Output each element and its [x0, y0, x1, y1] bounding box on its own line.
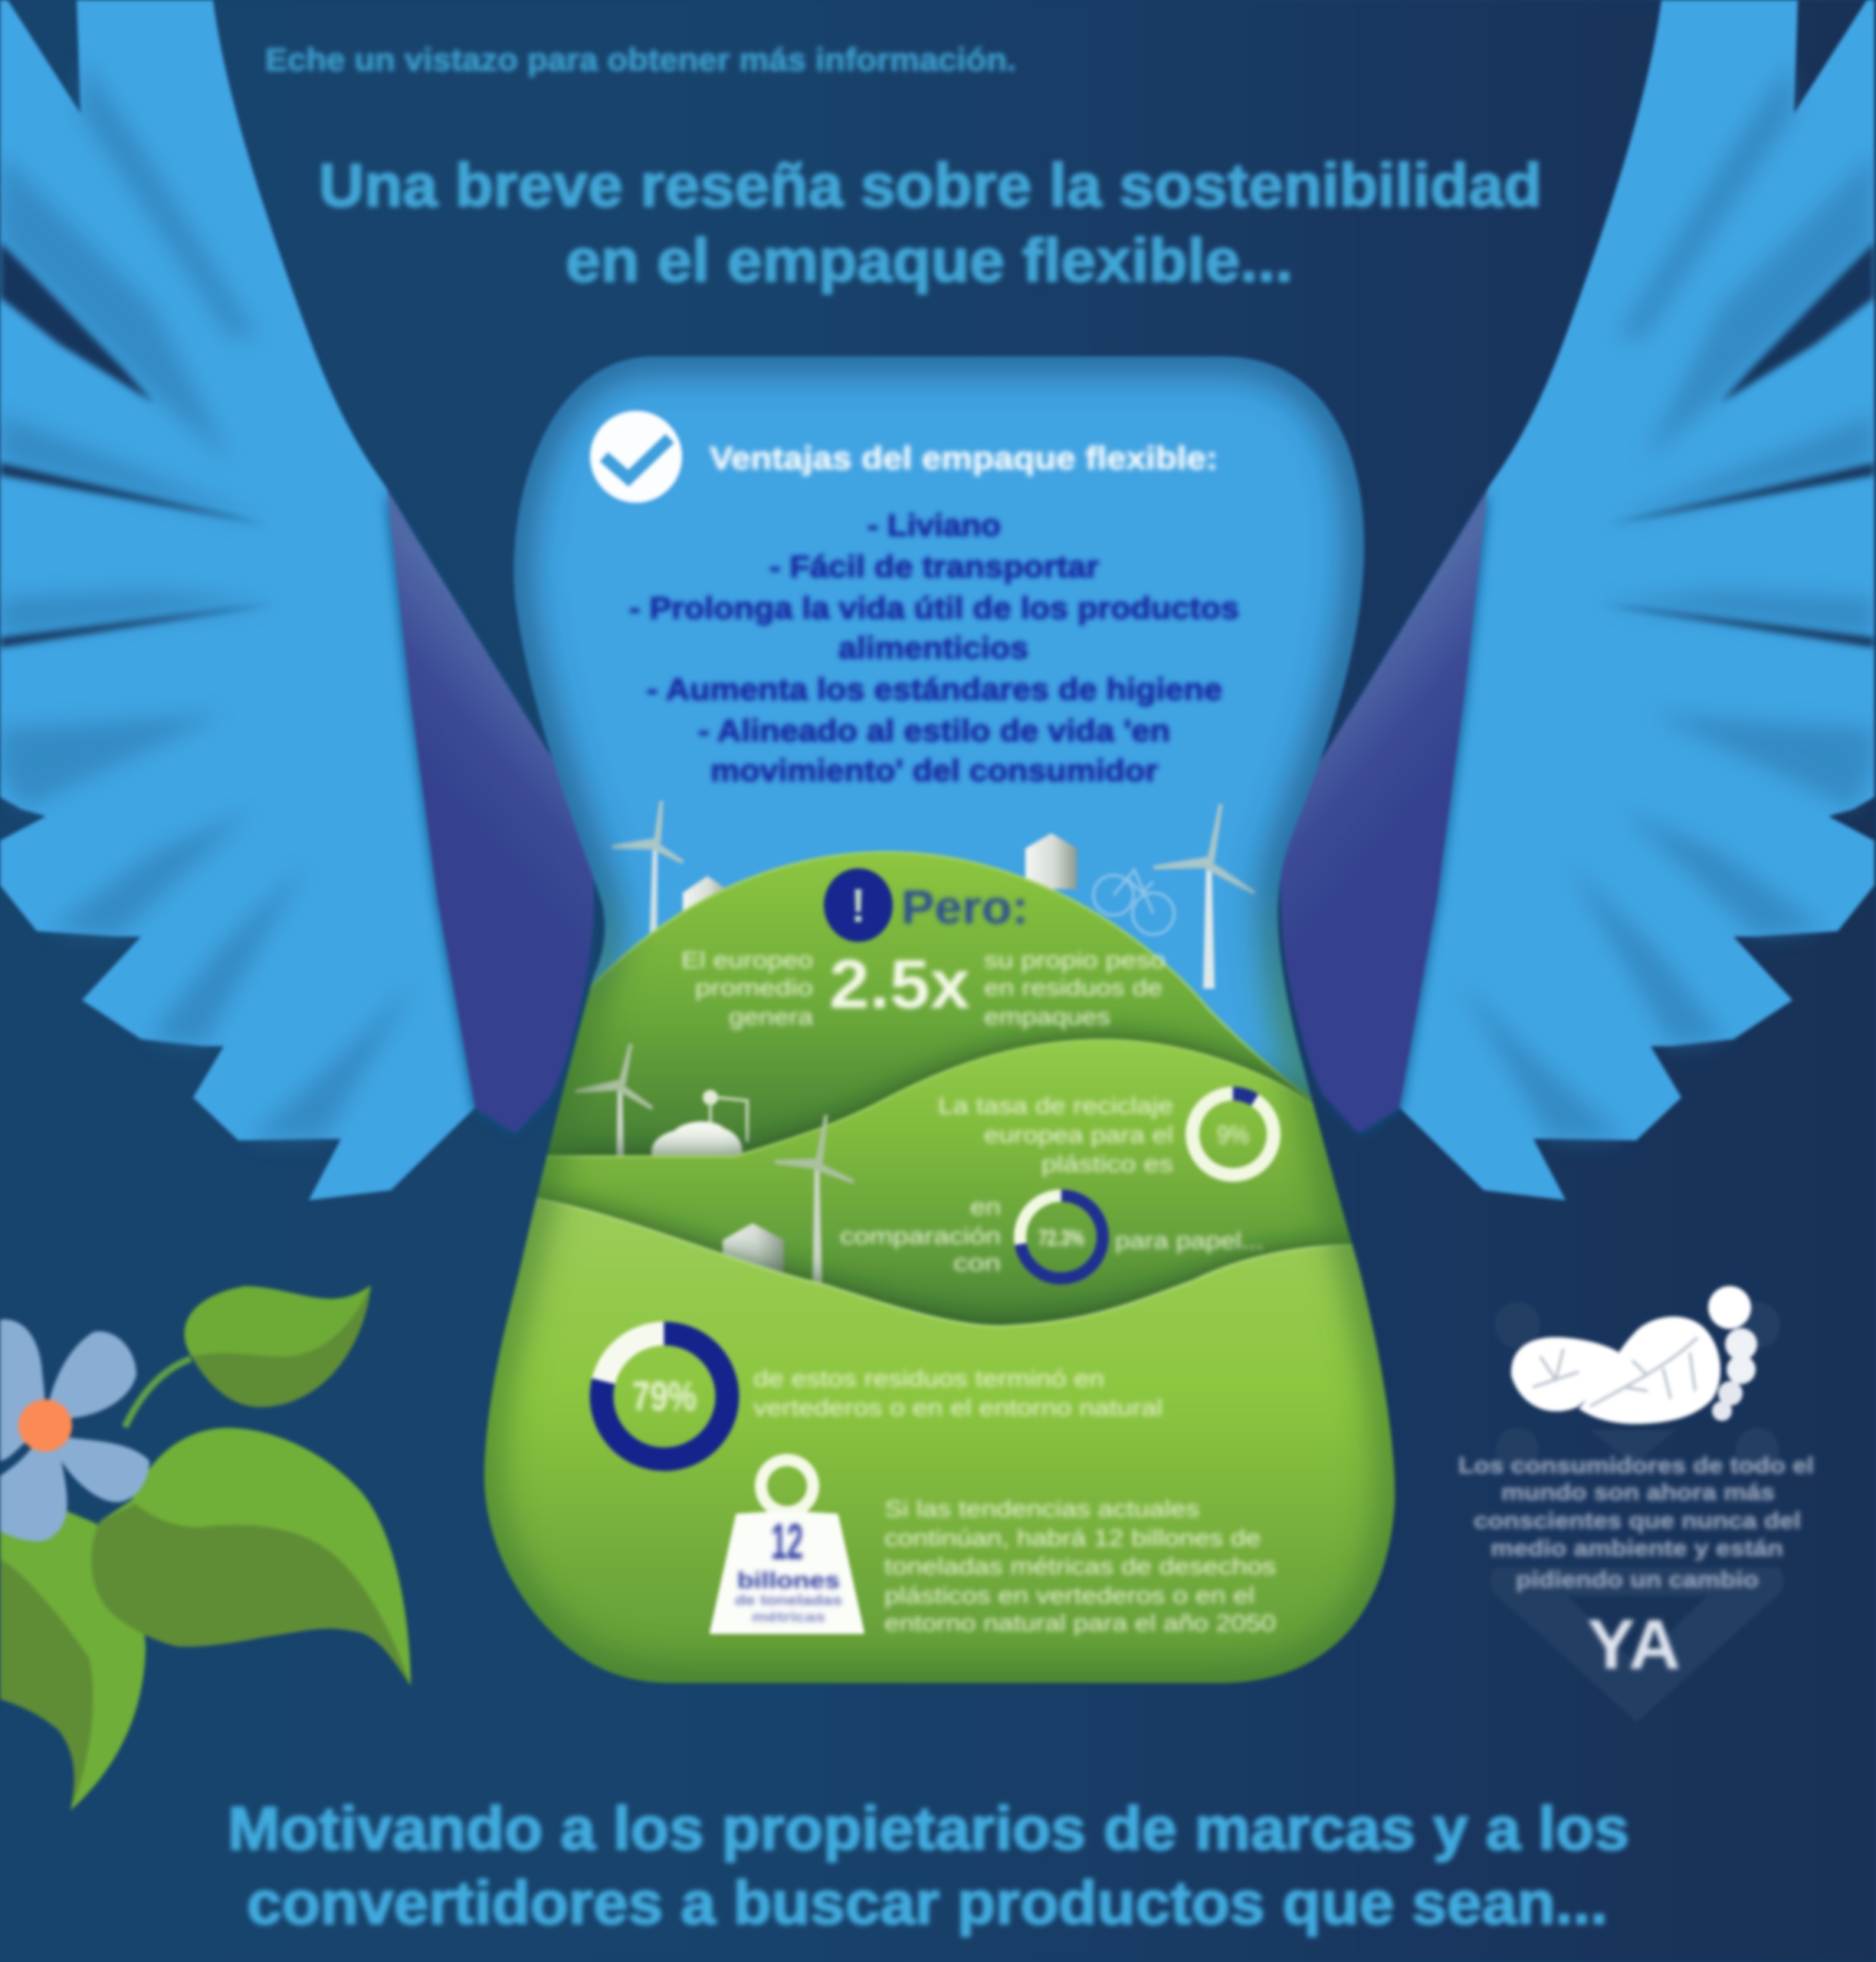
- consumer text: medio ambiente y están: [1491, 1536, 1783, 1561]
- footprint consumer panel: [1458, 1286, 1814, 1722]
- icon: leaf footprint: [1511, 1286, 1757, 1424]
- stat: 2.5x: genera: [729, 1003, 814, 1030]
- projection text: toneladas métricas de desechos: [884, 1553, 1276, 1580]
- icon: weight 12 billones: billones: [737, 1568, 840, 1593]
- icon: weight 12 billones: [711, 1460, 863, 1632]
- icon: weight 12 billones: métricas: [752, 1609, 825, 1625]
- consumer text: pidiendo un cambio: [1516, 1567, 1759, 1593]
- consumer text: mundo son ahora más: [1501, 1480, 1775, 1505]
- projection text: [884, 1495, 1276, 1636]
- donut 72.3%: [1020, 1196, 1103, 1278]
- feather gaps: [0, 242, 274, 648]
- advantages list: - Prolonga la vida útil de los productos: [629, 592, 1239, 625]
- heading: Pero: Pero:: [901, 881, 1028, 934]
- stat: recycling paper 72.3%: [840, 1193, 1264, 1278]
- bottom heading: Motivando a los propietarios de marcas y a los: [228, 1794, 1629, 1862]
- advantages heading: Ventajas del empaque flexible:: [710, 440, 1218, 476]
- YA: YA: [1587, 1606, 1681, 1684]
- stat: 79% landfill: vertederos o en el entorno natural: [753, 1394, 1163, 1421]
- right wing: [1281, 0, 1874, 1200]
- large leaf: [91, 1428, 411, 1686]
- advantages list: - Aumenta los estándares de higiene: [647, 673, 1222, 707]
- stat: 2.5x: 2.5x: [829, 947, 970, 1023]
- bottom heading: convertidores a buscar productos que sean...: [247, 1868, 1608, 1937]
- stat: 2.5x: promedio: [695, 974, 813, 1001]
- lower leaf: [0, 1511, 146, 1810]
- icon: exclamation: [824, 868, 893, 942]
- icon: weight 12 billones: 12: [771, 1513, 803, 1570]
- wind turbine mid right: [775, 1115, 854, 1295]
- intro line: Eche un vistazo para obtener más información.: [265, 41, 1016, 77]
- flower petals: [0, 1320, 149, 1541]
- middle hill: [537, 1021, 1350, 1314]
- stat: 2.5x: su propio peso: [984, 947, 1166, 973]
- consumer text: [1458, 1453, 1814, 1593]
- small leaf: [185, 1285, 371, 1407]
- stem: [125, 1359, 191, 1427]
- indigo wing wedge: [387, 489, 594, 1134]
- donut 79%: [602, 1334, 727, 1459]
- stat: recycling paper 72.3%: con: [953, 1249, 1001, 1276]
- bottle panel: [460, 337, 1425, 1724]
- stat: 2.5x: empaques: [984, 1003, 1110, 1030]
- feather shading: [0, 61, 415, 1139]
- title: en el empaque flexible...: [566, 226, 1293, 294]
- wind turbine top right: [1153, 804, 1254, 989]
- wind turbine mid left: [573, 1042, 654, 1157]
- stat: 2.5x: [681, 947, 1166, 1030]
- advantages list: movimiento' del consumidor: [710, 754, 1158, 788]
- title: [319, 151, 1542, 294]
- front hill: [460, 1189, 1418, 1724]
- projection text: Si las tendencias actuales: [884, 1495, 1199, 1522]
- electric car: [651, 1090, 747, 1159]
- blue panel fill: [512, 354, 1366, 1097]
- icon: exclamation: !: [851, 880, 866, 933]
- advantages list: - Alineado al estilo de vida 'en: [698, 714, 1170, 748]
- back hill: [547, 848, 1314, 1157]
- stat: recycling plastic 9%: europea para el: [984, 1121, 1173, 1148]
- advantages list: [629, 509, 1239, 788]
- house right: [1025, 833, 1077, 889]
- stat: recycling paper 72.3%: para papel...: [1115, 1227, 1264, 1254]
- left wing: [0, 0, 594, 1200]
- house lower: [723, 1223, 784, 1272]
- projection text: entorno natural para el año 2050: [884, 1609, 1276, 1636]
- stat: 2.5x: en residuos de: [984, 974, 1163, 1001]
- stat: 79% landfill: de estos residuos terminó en: [753, 1365, 1104, 1392]
- bottle inner shadow: [484, 356, 1395, 1683]
- flower centre: [18, 1399, 72, 1452]
- stat: recycling plastic 9%: La tasa de reciclaje: [938, 1092, 1173, 1119]
- bicycle icon: [1094, 870, 1174, 934]
- advantages list: alimenticios: [838, 632, 1028, 665]
- donut 9%: [1192, 1094, 1274, 1175]
- stat: recycling paper 72.3%: en: [970, 1193, 1001, 1220]
- stat: 2.5x: El europeo: [681, 947, 813, 973]
- house left: [680, 874, 726, 913]
- stat: recycling paper 72.3%: comparación: [840, 1222, 1001, 1249]
- title: Una breve reseña sobre la sostenibilidad: [319, 151, 1542, 219]
- donut 72.3%: 72.3%: [1038, 1226, 1084, 1251]
- illustration: flower and leaves: [0, 1285, 411, 1810]
- wing feathers: [0, 0, 475, 1200]
- icon: check mark: [590, 411, 682, 503]
- icon: weight 12 billones: de toneladas: [735, 1593, 842, 1608]
- faint heart backdrop: [1490, 1302, 1784, 1722]
- donut 9%: 9%: [1217, 1120, 1249, 1149]
- stat: 79% landfill: [602, 1334, 1163, 1459]
- consumer text: conscientes que nunca del: [1474, 1508, 1801, 1534]
- stat: recycling plastic 9%: [938, 1092, 1274, 1177]
- stat: recycling plastic 9%: plástico es: [1041, 1150, 1173, 1177]
- advantages list: - Fácil de transportar: [769, 550, 1099, 584]
- donut 79%: 79%: [632, 1373, 697, 1419]
- consumer text: Los consumidores de todo el: [1458, 1453, 1814, 1478]
- projection text: plásticos en vertederos o en el: [884, 1582, 1254, 1609]
- bottom heading: [228, 1794, 1629, 1937]
- projection text: continúan, habrá 12 billones de: [884, 1524, 1261, 1551]
- advantages list: - Liviano: [867, 509, 1001, 543]
- wind turbine top left: [612, 801, 683, 950]
